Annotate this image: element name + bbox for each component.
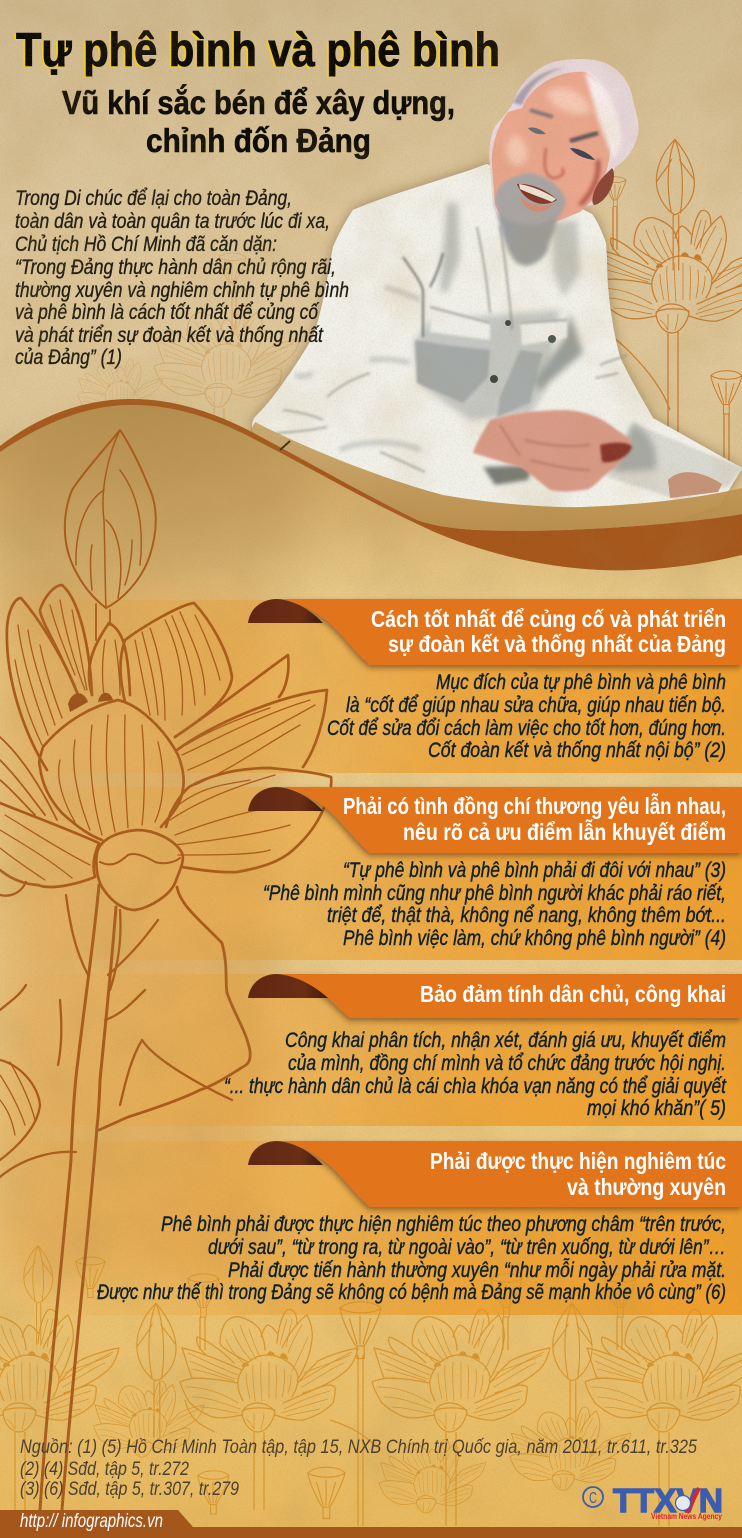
hand holding paper (473, 410, 742, 500)
large lotus line drawing on the left (0, 430, 331, 1510)
subtitle: chỉnh đốn Đảng (146, 122, 371, 159)
section 4 (97, 1141, 742, 1304)
intro text block: toàn dân và toàn quân ta trước lúc đi xa, (15, 210, 330, 233)
source notes (20, 1436, 697, 1500)
intro text block: Trong Di chúc để lại cho toàn Đảng, (15, 187, 292, 210)
body text (97, 1213, 726, 1304)
intro text block: Chủ tịch Hồ Chí Minh đã căn dặn: (15, 233, 277, 256)
section 3 (224, 974, 742, 1120)
jacket and body (252, 164, 742, 530)
footer bar with URL: http:// infographics.vn (20, 1511, 163, 1532)
footer bar with URL (0, 1510, 742, 1538)
intro text block: “Trong Đảng thực hành dân chủ rộng rãi, (15, 256, 336, 279)
seed pod (96, 830, 183, 910)
ribbon (248, 1141, 742, 1207)
bottom lotus field (0, 1246, 742, 1526)
section 2 (248, 787, 742, 950)
ribbon (248, 599, 742, 665)
heading (371, 606, 726, 657)
source notes: (3) (6) Sđd, tập 5, tr.307, tr.279 (20, 1478, 239, 1500)
bud (65, 430, 156, 640)
portrait of President Ho Chi Minh (252, 59, 742, 530)
intro text block: và phát triển sự đoàn kết và thống nhất (15, 324, 324, 347)
intro text block (15, 187, 349, 369)
section 1 (248, 599, 742, 762)
heading (430, 1148, 726, 1200)
ribbon (248, 974, 742, 1018)
ribbon (248, 787, 742, 853)
beard (497, 212, 556, 266)
TTXVN logo: TTXVN (613, 1482, 723, 1519)
body text (224, 1029, 727, 1120)
body text (263, 859, 726, 950)
heading (343, 792, 726, 845)
jacket shading (277, 203, 628, 485)
TTXVN logo: Vietnam News Agency (651, 1512, 722, 1521)
orange tinted text bands (0, 600, 742, 1315)
stem and leaves (40, 885, 99, 1510)
title: Tự phê bình và phê bình (16, 23, 500, 76)
lotus drawing behind the intro text (78, 253, 300, 470)
background: aged paper (0, 0, 742, 560)
intro text block: và phê bình là cách tốt nhất để củng cố (15, 301, 320, 324)
head (489, 59, 639, 235)
petals (7, 598, 78, 770)
lotus drawing at top right (594, 139, 742, 480)
intro text block: của Đảng” (1) (15, 346, 122, 369)
intro text block: thường xuyên và nghiêm chỉnh tự phê bình (15, 279, 349, 302)
petal spots (68, 693, 113, 712)
TTXVN logo: C (589, 1490, 597, 1507)
lower paper panel with wave (0, 399, 742, 1538)
source notes: (2) (4) Sđd, tập 5, tr.272 (20, 1458, 189, 1480)
subtitle: Vũ khí sắc bén để xây dựng, (62, 84, 455, 121)
body text (327, 671, 726, 762)
subtitle (62, 84, 455, 159)
